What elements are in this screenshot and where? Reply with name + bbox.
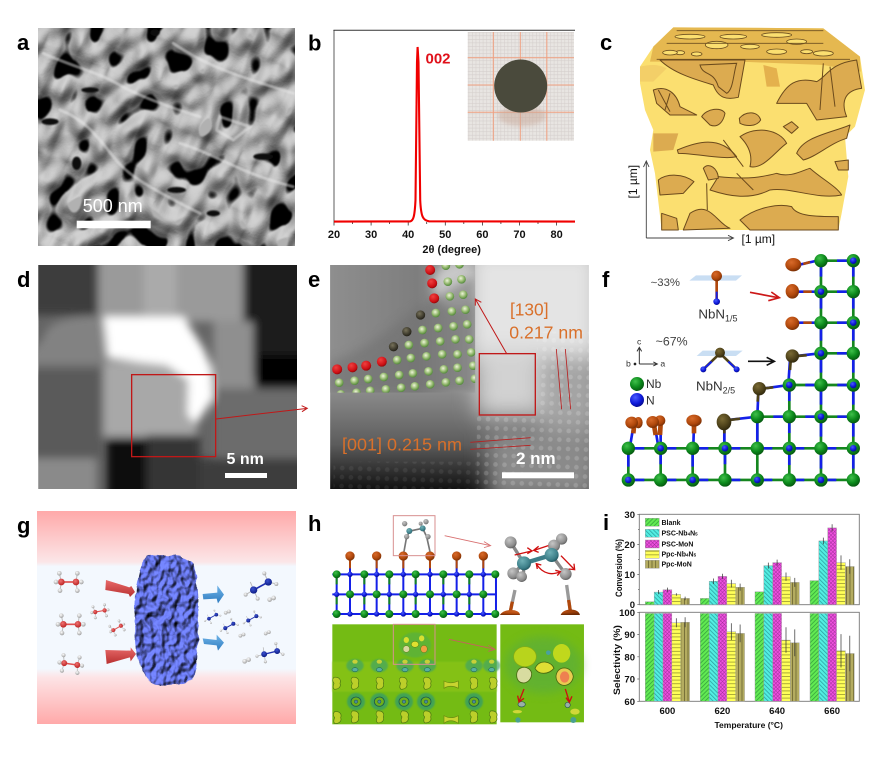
panel: i catalytic performance charts [603, 510, 859, 730]
XRD axes: 40 [402, 229, 414, 241]
XRD axes: 70 [513, 229, 526, 241]
XRD axes: 2θ (degree) [422, 244, 481, 256]
blue outlet arrows [203, 585, 224, 651]
red box with arrow, lattice lines and annotations: 0.217 nm [509, 322, 583, 342]
NbN2/5 site diagram [656, 335, 774, 396]
panel: e HAADF atomic image [308, 265, 589, 489]
panel: g reaction schematic [17, 511, 296, 724]
panel: b XRD pattern [308, 30, 575, 256]
XRD axes: 20 [328, 229, 340, 241]
zoom arrow upper [445, 536, 491, 548]
slab model with adsorbate [332, 519, 499, 618]
atomic resolution micrograph [330, 265, 589, 489]
SEM porous surface texture [38, 28, 295, 246]
red selection box and arrow [132, 375, 307, 457]
red inlet arrows [105, 580, 136, 664]
conversion bar chart: 20 [624, 540, 635, 551]
panel label h: h [308, 511, 321, 536]
panel label c: c [600, 30, 612, 55]
selectivity bar chart: 90 [624, 630, 635, 641]
selectivity bar chart: 100 [619, 608, 635, 619]
legend: PSC-Nb4N5 [662, 530, 698, 538]
selectivity bar chart: 660 [824, 706, 840, 717]
legend: PSC-MoN [662, 542, 693, 548]
XRD axes: 60 [476, 229, 489, 241]
scale bar 500 nm [77, 196, 151, 228]
crystal axes: b [626, 358, 631, 368]
zoom arrow lower [449, 639, 495, 651]
XRD axes [328, 30, 575, 256]
gradient background [37, 511, 296, 724]
XRD peak curve [334, 47, 575, 222]
XRD axes: 80 [550, 229, 563, 241]
element legend [630, 377, 662, 407]
charge density close-up [500, 624, 584, 723]
conversion bar chart [614, 510, 859, 611]
panel: a SEM image [18, 28, 295, 246]
STEM grey micrograph [38, 265, 297, 489]
NbN1/5 site diagram: ~33% [651, 277, 680, 289]
scale bar 5 nm [225, 451, 267, 478]
panel: c 3D reconstruction [600, 27, 865, 246]
XRD axes: 30 [365, 229, 377, 241]
peak label 002: 002 [426, 50, 451, 68]
legend: Ppc-Nb4N5 [662, 552, 697, 558]
red box with arrow, lattice lines and annotations: [130] [510, 300, 549, 320]
element legend: N [646, 393, 655, 407]
panel label f: f [602, 267, 610, 292]
adsorbate close-up with red arrows [500, 533, 580, 615]
scale axes with 1 micrometre labels [626, 161, 775, 246]
NbN2/5 site diagram: 2/5 [723, 386, 735, 396]
selectivity bar chart: 620 [714, 706, 730, 717]
selectivity bar chart: 640 [769, 706, 785, 717]
panel label g: g [17, 513, 30, 538]
scale axes with 1 micrometre labels: [1 µm] [626, 165, 640, 198]
3D porous cube [640, 27, 865, 230]
legend [645, 518, 698, 568]
scale bar 2 nm: 2 nm [516, 449, 556, 468]
NbN2/5 site diagram: NbN [696, 379, 723, 394]
selectivity bar chart: Temperature (°C) [714, 720, 783, 730]
crystal axes: a [660, 358, 665, 368]
panel label i: i [603, 510, 609, 535]
panel label b: b [308, 30, 321, 56]
scale bar 500 nm: 500 nm [83, 196, 143, 216]
selectivity bar chart: Selectivity (%) [612, 625, 623, 695]
pink selection box lower [393, 624, 435, 664]
panel label e: e [308, 267, 320, 292]
NbN1/5 site diagram: NbN [698, 306, 725, 321]
panel label d: d [17, 267, 30, 292]
panel: f atomic structure model [602, 254, 860, 487]
panel: h adsorption model and charge density [308, 511, 584, 724]
NbN1/5 site diagram [651, 271, 779, 323]
porous catalyst disc [135, 555, 198, 686]
charge density map main [332, 624, 500, 724]
selectivity bar chart: 80 [624, 652, 635, 664]
inset with overlaid atoms [330, 265, 476, 393]
conversion bar chart: 10 [624, 570, 635, 581]
conversion bar chart: 0 [630, 600, 635, 611]
scale bar 2 nm [502, 449, 574, 478]
conversion bar chart: Conversion (%) [614, 539, 625, 597]
red box with arrow, lattice lines and annotations [342, 299, 583, 455]
NbN lattice with surface atoms [622, 254, 860, 487]
product molecules [204, 571, 287, 668]
scale axes with 1 micrometre labels: [1 µm] [742, 232, 775, 246]
pink selection box upper [393, 516, 435, 556]
ethane molecules [54, 571, 128, 676]
scale bar 5 nm: 5 nm [226, 451, 264, 468]
legend: Blank [662, 520, 681, 527]
conversion bar chart: 30 [624, 510, 635, 521]
crystal axes [626, 336, 665, 368]
red box with arrow, lattice lines and annotations: [001] 0.215 nm [342, 435, 462, 455]
inset photo of disc on graph paper [468, 32, 574, 141]
selectivity bar chart: 600 [659, 706, 675, 717]
panel: d STEM image [17, 248, 317, 503]
panel label a: a [17, 30, 30, 55]
NbN1/5 site diagram: 1/5 [725, 313, 737, 323]
selectivity bar chart [612, 608, 859, 730]
crystal axes: c [637, 336, 642, 346]
selectivity bar chart: 70 [624, 675, 635, 686]
element legend: Nb [646, 377, 662, 391]
XRD axes: 50 [439, 229, 451, 241]
NbN2/5 site diagram: ~67% [656, 335, 688, 349]
selectivity bar chart: 60 [624, 697, 635, 708]
legend: Ppc-MoN [662, 562, 692, 568]
